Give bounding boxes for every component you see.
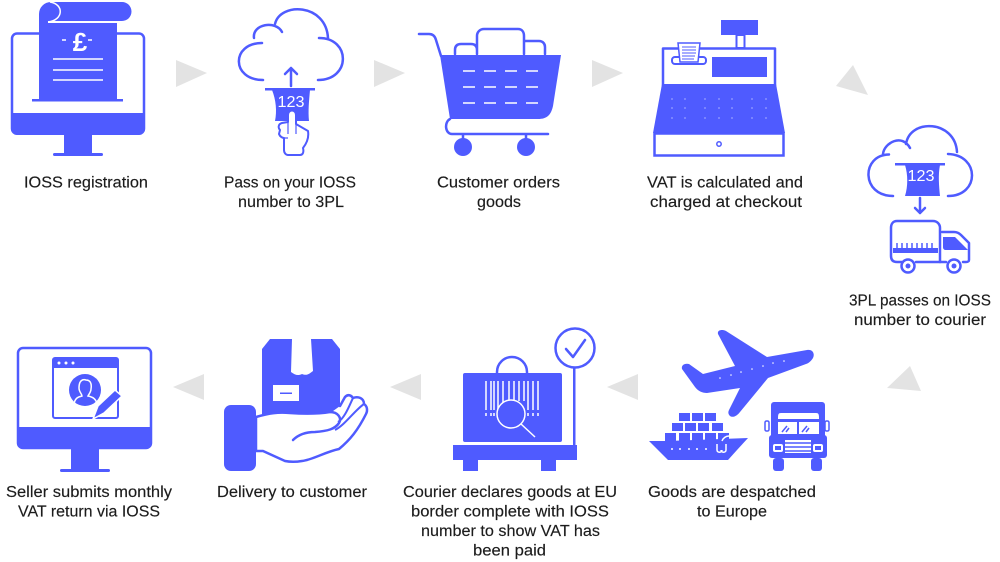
label: goods bbox=[477, 194, 521, 211]
icon: cloud, ticket and truck bbox=[868, 126, 972, 273]
label: Seller submits monthly bbox=[6, 484, 172, 501]
label: Courier declares goods at EU bbox=[403, 484, 617, 501]
label: 3PL passes on IOSS bbox=[849, 292, 991, 310]
label: Goods are despatched bbox=[648, 484, 816, 501]
label: number to 3PL bbox=[238, 194, 344, 211]
label: border complete with IOSS bbox=[411, 504, 609, 520]
step 6: goods despatched bbox=[648, 330, 829, 520]
icon: monitor with pound document bbox=[11, 2, 145, 156]
label bbox=[648, 484, 816, 520]
icon: cloud, ticket and truck: 123 bbox=[908, 168, 935, 185]
label: to Europe bbox=[697, 504, 767, 520]
label: Pass on your IOSS bbox=[224, 174, 356, 192]
label: VAT is calculated and bbox=[647, 174, 803, 192]
step 3: customer orders goods bbox=[419, 29, 561, 211]
label bbox=[6, 484, 172, 520]
icon: cloud with ticket and hand bbox=[239, 9, 343, 155]
label: Customer orders bbox=[437, 174, 560, 192]
step 4: VAT calculated bbox=[647, 20, 803, 211]
label bbox=[224, 174, 356, 211]
icon: cloud with ticket and hand: 123 bbox=[278, 94, 305, 111]
icon: monitor with pound document: £ bbox=[73, 27, 88, 57]
arrow bbox=[836, 65, 868, 95]
arrow bbox=[887, 366, 921, 391]
arrow bbox=[374, 60, 405, 87]
arrow bbox=[390, 374, 421, 400]
step 7: courier declares goods bbox=[403, 328, 617, 560]
label: number to courier bbox=[854, 312, 986, 329]
label: IOSS registration bbox=[24, 174, 148, 192]
icon: cash register bbox=[653, 20, 785, 156]
step 2: pass on IOSS number bbox=[224, 9, 356, 211]
step 9: seller submits VAT return bbox=[6, 348, 172, 520]
label: number to show VAT has bbox=[421, 523, 600, 540]
arrow bbox=[176, 60, 207, 87]
step 8: delivery to customer bbox=[217, 339, 367, 501]
arrow bbox=[607, 374, 638, 400]
arrow bbox=[592, 60, 623, 87]
label bbox=[403, 484, 617, 560]
label bbox=[849, 292, 991, 329]
step 1: IOSS registration bbox=[11, 2, 148, 192]
step 5: 3PL passes number to courier bbox=[849, 126, 991, 329]
icon: scale with barcode bag bbox=[453, 328, 594, 471]
arrow bbox=[173, 374, 204, 400]
icon: monitor with user window and pencil bbox=[17, 348, 152, 472]
icon: shopping cart bbox=[419, 29, 561, 156]
label: been paid bbox=[473, 542, 546, 560]
icon: hand holding parcel bbox=[224, 339, 367, 471]
icon: plane, ship and truck bbox=[649, 330, 829, 471]
label bbox=[437, 174, 560, 211]
label bbox=[647, 174, 803, 211]
label: Delivery to customer bbox=[217, 484, 367, 501]
label: charged at checkout bbox=[650, 194, 803, 211]
label: VAT return via IOSS bbox=[18, 504, 160, 520]
